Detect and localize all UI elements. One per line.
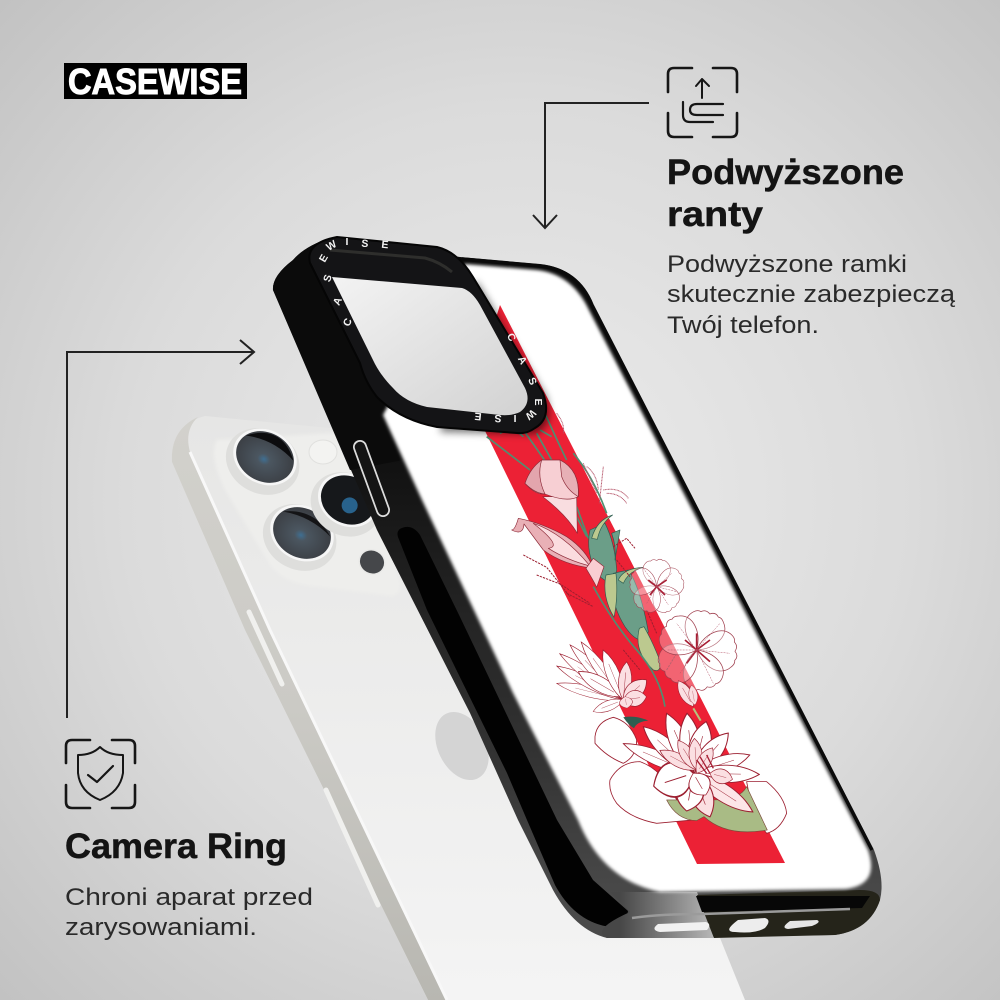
dark leaf patch	[623, 717, 648, 728]
bottom edge: translucent part	[602, 892, 714, 938]
ring body	[309, 237, 546, 433]
ring lettering: W	[523, 406, 538, 422]
port: mic	[784, 920, 819, 929]
heading: raised edges: Podwyższone	[667, 153, 904, 192]
ring inner wall highlight	[330, 250, 452, 272]
grass stems	[487, 410, 607, 538]
upper calla flower	[525, 460, 578, 533]
side button	[360, 447, 383, 510]
flash	[309, 440, 337, 464]
heading: raised edges	[667, 153, 904, 234]
stem	[593, 587, 665, 707]
arrow: camera ring	[67, 340, 254, 718]
red stripe	[470, 305, 785, 864]
ring lettering: W	[324, 238, 339, 254]
bottom edge: dark part	[697, 890, 880, 938]
phone side rim	[172, 417, 447, 1000]
ring opening	[332, 277, 528, 415]
rim highlight	[190, 452, 447, 1000]
calla flower outline on white	[557, 413, 628, 503]
long black inner slot	[398, 527, 628, 927]
text: camera ring description: Chroni aparat przed	[65, 884, 313, 911]
ring lettering: A	[515, 354, 529, 367]
ring lettering: S	[321, 273, 335, 283]
lidar sensor	[355, 545, 389, 579]
back panel (white)	[383, 264, 871, 892]
ring shadow	[440, 280, 549, 434]
ring lettering: E	[474, 410, 482, 422]
bottom edge: black strip	[696, 896, 870, 912]
bottom edge: highlight	[632, 909, 850, 918]
ring lettering: E	[317, 252, 331, 265]
ring lettering: E	[532, 398, 544, 406]
sprigs	[523, 538, 677, 670]
large water lily	[621, 709, 759, 821]
ring lettering: S	[525, 376, 539, 387]
hibiscus flowers	[626, 559, 738, 694]
ring lettering	[317, 236, 544, 424]
camera ring	[309, 236, 549, 434]
arrow: raised edges	[533, 103, 649, 228]
hibiscus centres	[648, 580, 710, 663]
camera plateau	[214, 432, 400, 596]
lens: right	[299, 460, 392, 549]
lily centre	[697, 755, 713, 773]
text: raised edges description: skutecznie zabezpieczą	[667, 281, 956, 308]
leaves	[589, 515, 660, 671]
ring lettering: C	[341, 316, 355, 328]
text: camera ring description: zarysowaniami.	[65, 914, 257, 941]
ring lettering: A	[331, 295, 345, 307]
ring lettering: S	[361, 238, 369, 250]
floral artwork	[487, 410, 787, 833]
hibiscus fine veins	[643, 568, 730, 683]
lens: top	[214, 415, 311, 508]
port: charging	[729, 918, 768, 932]
heading: raised edges: ranty	[667, 195, 764, 234]
bud	[673, 678, 699, 710]
apple logo	[425, 703, 499, 789]
lower calla flower	[512, 518, 604, 587]
lens: bottom	[251, 491, 348, 584]
white phone behind the case	[172, 415, 745, 1000]
icon: shield with check	[66, 740, 135, 808]
upper water lily	[554, 639, 652, 716]
ring lettering: S	[494, 412, 502, 424]
logo: CASEWISE	[68, 61, 242, 102]
side buttons	[249, 612, 378, 905]
upper black side	[273, 238, 470, 470]
text: raised edges description: Podwyższone ramki	[667, 251, 907, 278]
ring lettering: E	[381, 239, 389, 251]
stem to bud	[693, 708, 701, 721]
thin upper rim	[462, 259, 872, 850]
green lily pad over stripe	[667, 787, 767, 832]
ring lettering: I	[346, 236, 349, 248]
text: raised edges description	[667, 251, 956, 339]
text: camera ring description	[65, 884, 313, 941]
heading: camera ring: Camera Ring	[65, 827, 287, 866]
ring lettering: C	[504, 331, 518, 344]
ring lettering: I	[513, 412, 516, 424]
clear case with black bumper	[273, 238, 882, 938]
bumper outline	[273, 238, 882, 938]
icon: raised layers	[668, 68, 737, 137]
port: speaker	[654, 922, 709, 932]
text: raised edges description: Twój telefon.	[667, 312, 819, 339]
lily pads	[595, 717, 787, 833]
